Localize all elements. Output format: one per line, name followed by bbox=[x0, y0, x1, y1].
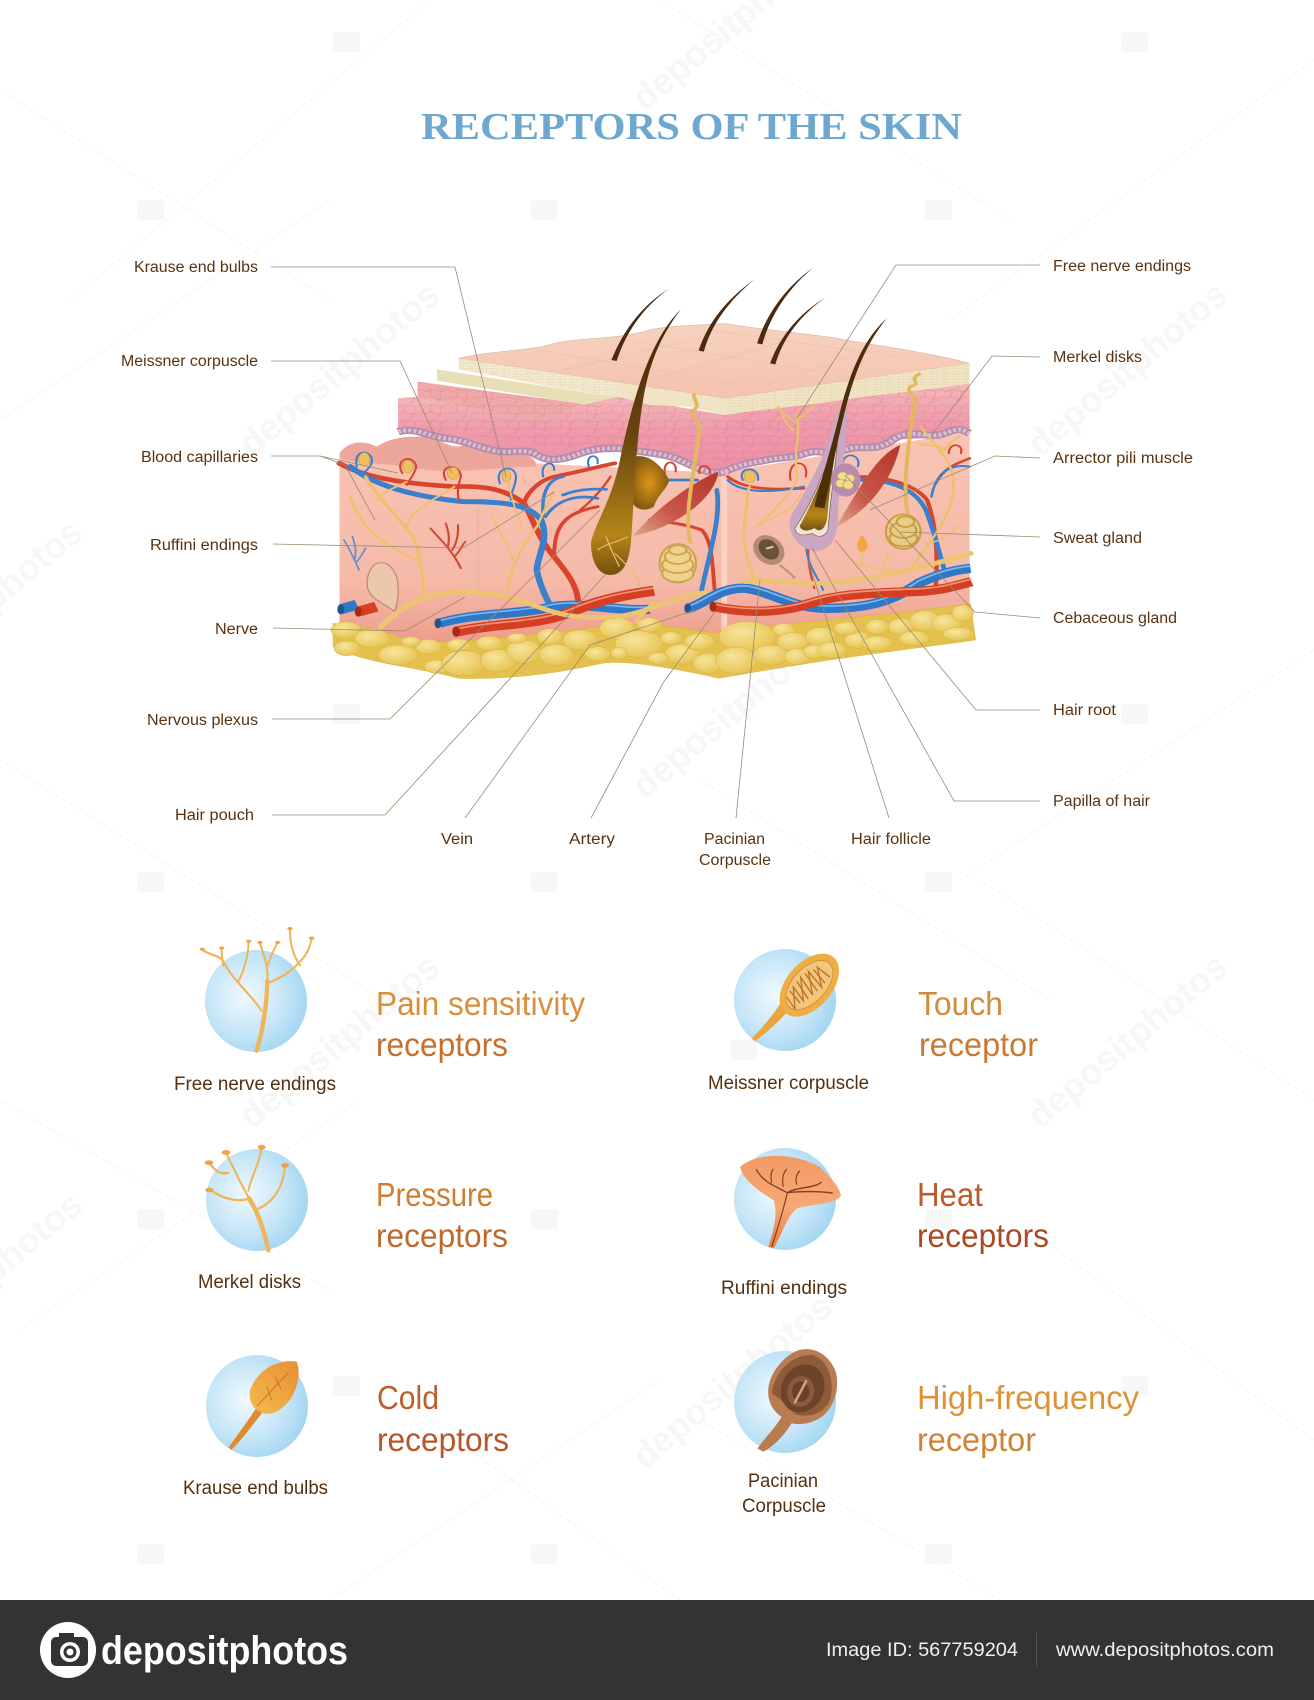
receptors inside the dermis bbox=[350, 405, 960, 593]
right follicle wall bbox=[795, 432, 838, 536]
callout labels right: Arrector pili muscle bbox=[1053, 450, 1193, 467]
label: Ruffini endings bbox=[721, 1278, 847, 1299]
callout labels left: Meissner corpuscle bbox=[121, 353, 258, 370]
big vessel red right bbox=[709, 579, 971, 612]
skin cross-section diagram bbox=[331, 267, 976, 679]
arrector muscle left bbox=[633, 472, 718, 536]
dermal papillae lobes bbox=[340, 437, 537, 471]
sweat duct left bbox=[688, 393, 700, 543]
dermis left block bbox=[340, 437, 725, 647]
icon: ruffini endings bbox=[734, 1148, 841, 1250]
callout labels bottom: Hair follicle bbox=[851, 831, 931, 848]
legend: ruffini endings bbox=[721, 1148, 1049, 1299]
nerve branches bbox=[366, 477, 424, 593]
callout labels right: Merkel disks bbox=[1053, 349, 1142, 366]
surface creases bbox=[537, 330, 897, 390]
callout labels left: Nerve bbox=[215, 621, 258, 638]
heading: High-frequency bbox=[917, 1379, 1139, 1416]
heading: Cold bbox=[377, 1379, 439, 1416]
label: Free nerve endings bbox=[174, 1074, 336, 1095]
callout labels left bbox=[121, 259, 258, 824]
big vessel red left bbox=[434, 588, 654, 637]
legend: krause end bulbs bbox=[183, 1355, 509, 1499]
callout labels left: Ruffini endings bbox=[150, 537, 258, 554]
legend: meissner corpuscle bbox=[708, 941, 1038, 1094]
callout labels right bbox=[1053, 258, 1193, 810]
logo wordmark: depositphotos bbox=[101, 1629, 348, 1673]
basal wavy band left bbox=[398, 430, 724, 473]
callout labels left: Blood capillaries bbox=[141, 449, 258, 466]
callout labels right: Cebaceous gland bbox=[1053, 610, 1177, 627]
right hair bbox=[814, 318, 887, 508]
icon: pacinian corpuscle bbox=[734, 1349, 837, 1453]
heading: Touch bbox=[918, 985, 1003, 1022]
callout labels right: Papilla of hair bbox=[1053, 793, 1150, 810]
blue nerve tree bbox=[344, 537, 366, 570]
sebaceous gland left bbox=[629, 456, 669, 510]
label second line: Corpuscle bbox=[742, 1496, 826, 1517]
heading second line: receptors bbox=[376, 1217, 508, 1254]
icon: free nerve endings bbox=[200, 927, 314, 1052]
sweat gland right bbox=[886, 514, 921, 549]
callout labels right: Free nerve endings bbox=[1053, 258, 1191, 275]
legend: pacinian corpuscle bbox=[734, 1349, 1139, 1517]
right follicle pouch bbox=[790, 412, 847, 552]
callout labels left: Hair pouch bbox=[175, 807, 254, 824]
sweat duct right bbox=[906, 373, 921, 513]
leader lines bbox=[271, 265, 1040, 818]
callout labels left: Krause end bulbs bbox=[134, 259, 258, 276]
label: Merkel disks bbox=[198, 1272, 301, 1293]
callout labels left: Nervous plexus bbox=[147, 712, 258, 729]
krause-like oval bbox=[367, 563, 398, 612]
callout labels bottom bbox=[441, 831, 931, 869]
cream stratum front right bbox=[725, 363, 970, 415]
watermark pattern: depositphotos bbox=[624, 1285, 840, 1476]
heading second line: receptor bbox=[917, 1421, 1036, 1458]
callout labels right: Hair root bbox=[1053, 702, 1117, 719]
heading second line: receptors bbox=[917, 1217, 1049, 1254]
legend: free nerve endings bbox=[174, 927, 585, 1095]
icon: merkel disks bbox=[205, 1145, 308, 1251]
callout labels bottom: Artery bbox=[569, 831, 615, 848]
heading: Heat bbox=[917, 1176, 983, 1213]
cream stratum front left bbox=[618, 382, 725, 415]
callout labels bottom: Corpuscle bbox=[699, 852, 771, 869]
capillary loops bbox=[356, 445, 961, 500]
arterial capillaries bbox=[340, 458, 970, 600]
thin hairs bbox=[611, 267, 826, 364]
callout labels right: Sweat gland bbox=[1053, 530, 1142, 547]
icon: meissner corpuscle bbox=[734, 941, 849, 1051]
pale epidermis step bbox=[418, 382, 585, 421]
big vessel blue left bbox=[439, 603, 650, 623]
label: Krause end bulbs bbox=[183, 1478, 328, 1499]
heading second line: receptors bbox=[376, 1026, 508, 1063]
label: Meissner corpuscle bbox=[708, 1073, 869, 1094]
right follicle bulb bbox=[800, 430, 838, 530]
heading: Pressure bbox=[376, 1176, 493, 1213]
main nerve right bbox=[745, 553, 971, 583]
heading second line: receptor bbox=[919, 1026, 1038, 1063]
image id: Image ID: 567759204 bbox=[826, 1640, 1018, 1661]
ruffini tree bbox=[431, 523, 465, 568]
hair follicle left bbox=[591, 309, 681, 575]
callout labels bottom: Vein bbox=[441, 831, 473, 848]
callout labels bottom: Pacinian bbox=[704, 831, 765, 848]
sweat gland coil left bbox=[660, 544, 696, 583]
watermark pattern: depositphotos bbox=[1019, 945, 1235, 1136]
watermark pattern: depositphotos bbox=[231, 273, 447, 464]
footer bar bbox=[0, 1600, 1314, 1700]
website: www.depositphotos.com bbox=[1055, 1640, 1274, 1661]
label: Pacinian bbox=[748, 1471, 818, 1492]
watermark pattern: depositphotos bbox=[231, 945, 447, 1136]
cut vessels bbox=[337, 604, 376, 617]
epidermis left bbox=[398, 397, 725, 474]
capillary network bbox=[340, 445, 970, 605]
icon: krause end bulbs bbox=[206, 1355, 308, 1457]
legend: merkel disks bbox=[198, 1145, 508, 1293]
epidermis right bbox=[725, 383, 970, 472]
big vessel blue right bbox=[684, 566, 971, 613]
heading: Pain sensitivity bbox=[376, 985, 585, 1022]
venous capillaries bbox=[350, 466, 970, 605]
title: RECEPTORS OF THE SKIN bbox=[421, 106, 962, 148]
icon: camera logo bbox=[40, 1622, 96, 1678]
cream stratum step bbox=[437, 369, 618, 405]
watermark pattern: depositphotos bbox=[1019, 273, 1235, 464]
epidermis cell texture bbox=[398, 383, 970, 467]
pacinian corpuscle in skin bbox=[748, 532, 795, 578]
cream stratum top bbox=[459, 358, 618, 397]
basal wavy band right bbox=[725, 429, 970, 472]
watermark pattern: depositphotos bbox=[624, 615, 840, 806]
main nerve bbox=[381, 592, 706, 627]
small gland bbox=[857, 535, 867, 552]
fat layer bbox=[331, 603, 976, 679]
block crease shading bbox=[476, 507, 480, 617]
heading second line: receptors bbox=[377, 1421, 509, 1458]
dermis right block bbox=[725, 432, 970, 647]
sebaceous gland right bbox=[831, 463, 860, 497]
top skin surface bbox=[459, 323, 970, 398]
arrector muscle right bbox=[836, 445, 900, 527]
